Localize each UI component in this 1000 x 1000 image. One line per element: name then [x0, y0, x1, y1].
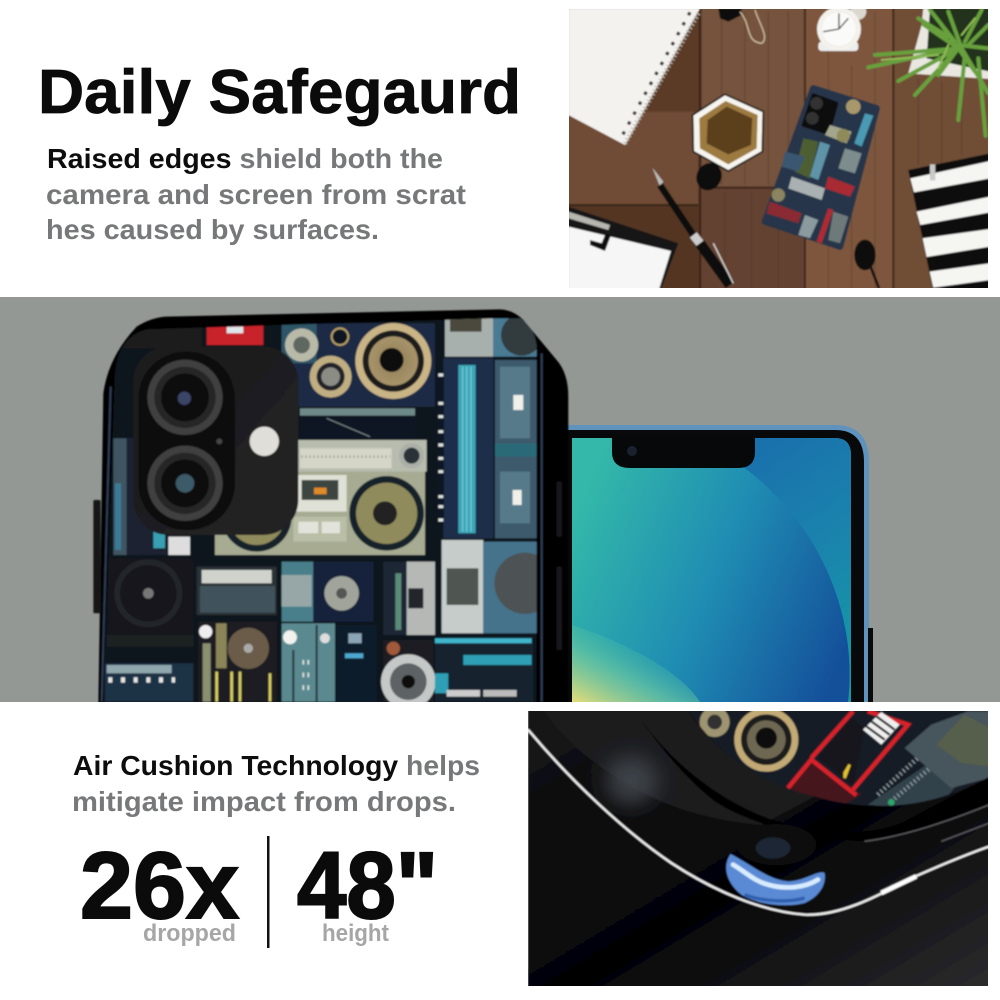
striped notebook [908, 153, 990, 292]
text block: air cushion: Air Cushion Technology helps [73, 750, 480, 781]
earphone [854, 240, 879, 288]
stat: 26x dropped: dropped [143, 920, 236, 947]
title: Daily Safegaurd [38, 58, 521, 127]
photo: phone case on wooden desk [565, 4, 995, 292]
glossy band highlight [576, 711, 815, 825]
gray band [0, 297, 1000, 702]
clock [817, 4, 866, 51]
potted plant [868, 8, 990, 136]
text block: raised edges: Raised edges shield both the [47, 143, 443, 174]
binder clip and chain [718, 8, 765, 43]
case outer shell [98, 309, 568, 705]
text block: air cushion: mitigate impact from drops. [72, 786, 456, 817]
divider [267, 836, 270, 948]
pen [652, 168, 733, 285]
clipboard [568, 207, 678, 292]
stat: 48" height: 48" [297, 833, 438, 939]
text block: raised edges [46, 143, 466, 245]
boombox collage artwork [100, 313, 556, 709]
notebook [568, 8, 700, 145]
text block: raised edges: camera and screen from scrat [46, 179, 466, 210]
coffee cup [692, 94, 763, 195]
stat: 48" height: height [322, 920, 389, 947]
stat: 26x dropped: 26x [80, 833, 239, 939]
phone case back [93, 309, 568, 709]
camera module [133, 347, 298, 535]
phone notch [612, 438, 755, 468]
photo: air cushion corner close-up [528, 707, 995, 988]
phone case miniature [765, 88, 877, 247]
white edge highlight line [528, 730, 990, 915]
text block: air cushion [72, 750, 480, 817]
text block: raised edges: hes caused by surfaces. [46, 214, 379, 245]
phone: front screen [560, 425, 873, 702]
curved rim [652, 735, 988, 842]
case artwork through the rim [688, 711, 988, 808]
air cushion bubble [726, 824, 825, 905]
